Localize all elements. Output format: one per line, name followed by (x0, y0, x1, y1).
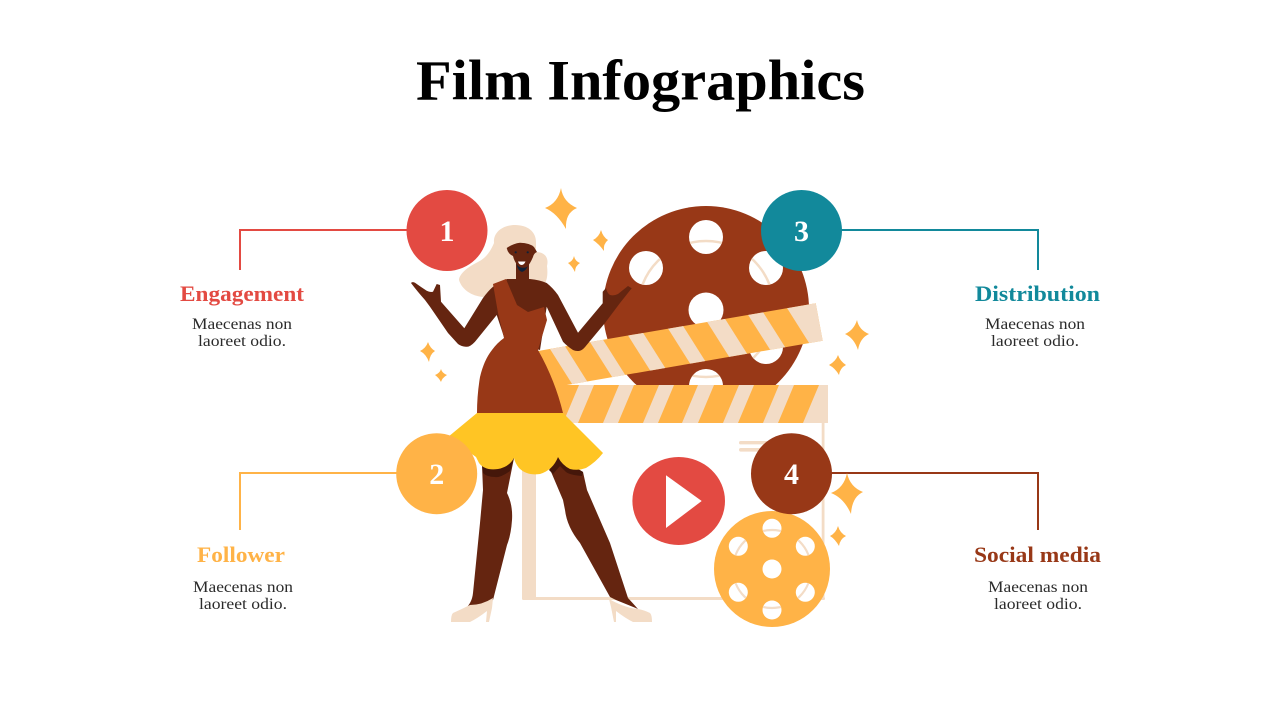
text block: follower: Maecenas non (193, 579, 293, 596)
eyes (515, 251, 529, 253)
arms and torso (411, 279, 632, 351)
illustration: clapper top stick (538, 303, 823, 385)
neck (516, 262, 529, 282)
text block: social media: laoreet odio. (994, 596, 1082, 613)
text block: social media: Social media (974, 542, 1101, 567)
text block: social media (974, 542, 1101, 613)
badge 1 (406, 190, 488, 271)
text block: follower: Follower (197, 542, 285, 567)
legs (465, 456, 638, 609)
badge 3: 3 (794, 215, 809, 248)
illustration: film reel large (604, 206, 809, 385)
icon: play button (632, 457, 725, 545)
dress (477, 279, 563, 413)
text block: engagement (180, 281, 305, 350)
text block: follower (193, 542, 293, 613)
badge 4: 4 (784, 458, 799, 491)
illustration: film reel small (714, 511, 830, 627)
illustration: clapper striped bar (538, 385, 828, 423)
connector: follower (240, 473, 397, 530)
badge 2: 2 (429, 458, 444, 491)
smile (518, 262, 526, 265)
icons: sparkles (420, 188, 869, 546)
hair (459, 225, 548, 297)
text block: social media: Maecenas non (988, 579, 1088, 596)
shoes (451, 598, 652, 622)
badge 4 (751, 433, 832, 514)
text block: distribution: Distribution (975, 281, 1100, 306)
badge 2 (396, 433, 477, 514)
skirt (448, 413, 603, 474)
text block: engagement: laoreet odio. (198, 333, 286, 350)
text block: engagement: Maecenas non (192, 316, 292, 333)
connector: distribution (841, 230, 1038, 270)
badge 3 (761, 190, 842, 271)
skirt shadow (482, 458, 583, 477)
title: Film Infographics (416, 50, 865, 112)
infographic canvas (180, 59, 1101, 627)
text block: follower: laoreet odio. (199, 596, 287, 613)
badge 1: 1 (440, 215, 454, 248)
chin shadow (516, 264, 529, 272)
illustration: clapperboard body (522, 420, 825, 600)
illustration: woman figure (411, 225, 652, 622)
text block: distribution (975, 281, 1100, 350)
text block: engagement: Engagement (180, 281, 305, 306)
text block: distribution: Maecenas non (985, 316, 1085, 333)
text block: distribution: laoreet odio. (991, 333, 1079, 350)
face (507, 243, 537, 268)
connector: engagement (240, 230, 407, 270)
connector: social media (831, 473, 1038, 530)
